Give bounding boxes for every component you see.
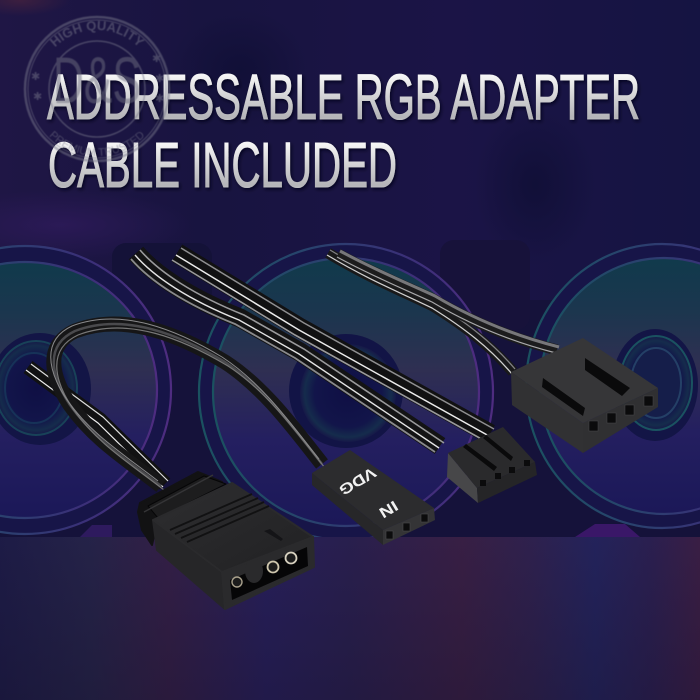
label: IN: IN xyxy=(376,497,401,521)
center key xyxy=(245,559,263,583)
top face xyxy=(312,450,434,530)
watermark stamp xyxy=(23,15,171,163)
pin left xyxy=(232,577,242,587)
stamp lower text: PREMIUM TRUSTED xyxy=(50,130,144,156)
pin sockets xyxy=(480,460,530,486)
stamp stars: ✱ xyxy=(31,71,40,83)
pin right xyxy=(286,552,296,564)
opening xyxy=(230,547,308,600)
slots xyxy=(463,435,513,471)
top face xyxy=(153,483,313,572)
stamp ring text: HIGH QUALITY xyxy=(50,20,145,47)
cable: upper left pair to 4-pin connector xyxy=(131,248,494,452)
stamp stars: ✱ xyxy=(152,53,161,65)
side face xyxy=(511,372,583,453)
stamp monogram: D&S xyxy=(53,43,141,117)
fan: middle xyxy=(199,244,493,540)
label: VDG: VDG xyxy=(336,463,379,498)
fan: right xyxy=(526,244,700,528)
cable: short stub behind RGB connector xyxy=(26,364,168,487)
pin sockets xyxy=(386,514,428,539)
stamp stars: ✱ xyxy=(155,73,164,85)
slots xyxy=(542,358,630,416)
front face xyxy=(583,388,658,453)
top ribs xyxy=(170,494,269,542)
side face xyxy=(312,473,383,545)
connector: small 4-pin xyxy=(447,427,537,503)
front face xyxy=(383,508,435,545)
title xyxy=(47,61,640,201)
front face xyxy=(222,537,314,609)
front face xyxy=(477,462,537,503)
stamp stars: ✱ xyxy=(155,93,164,105)
top face xyxy=(448,427,535,488)
grip ribs xyxy=(138,472,226,545)
background: blurred upper wall xyxy=(0,0,700,300)
cable: loop from RGB connector to VDG connector xyxy=(51,319,325,490)
top face xyxy=(511,338,658,423)
cable: upper right to large fan connector xyxy=(327,250,559,374)
key mark xyxy=(264,529,283,541)
background: fan frame band xyxy=(0,240,700,538)
side face xyxy=(447,453,478,503)
stamp stars: ✱ xyxy=(33,91,42,103)
pin sockets xyxy=(589,396,653,431)
connector: RGB 3-pin xyxy=(138,472,314,609)
side face xyxy=(153,520,225,609)
connector: VDG IN 3-pin xyxy=(312,450,435,545)
connector: large fan 4-pin xyxy=(511,338,658,453)
floor xyxy=(0,537,700,700)
pin middle xyxy=(268,562,278,572)
title line 2: CABLE INCLUDED xyxy=(48,129,397,201)
fan: left xyxy=(0,246,171,534)
